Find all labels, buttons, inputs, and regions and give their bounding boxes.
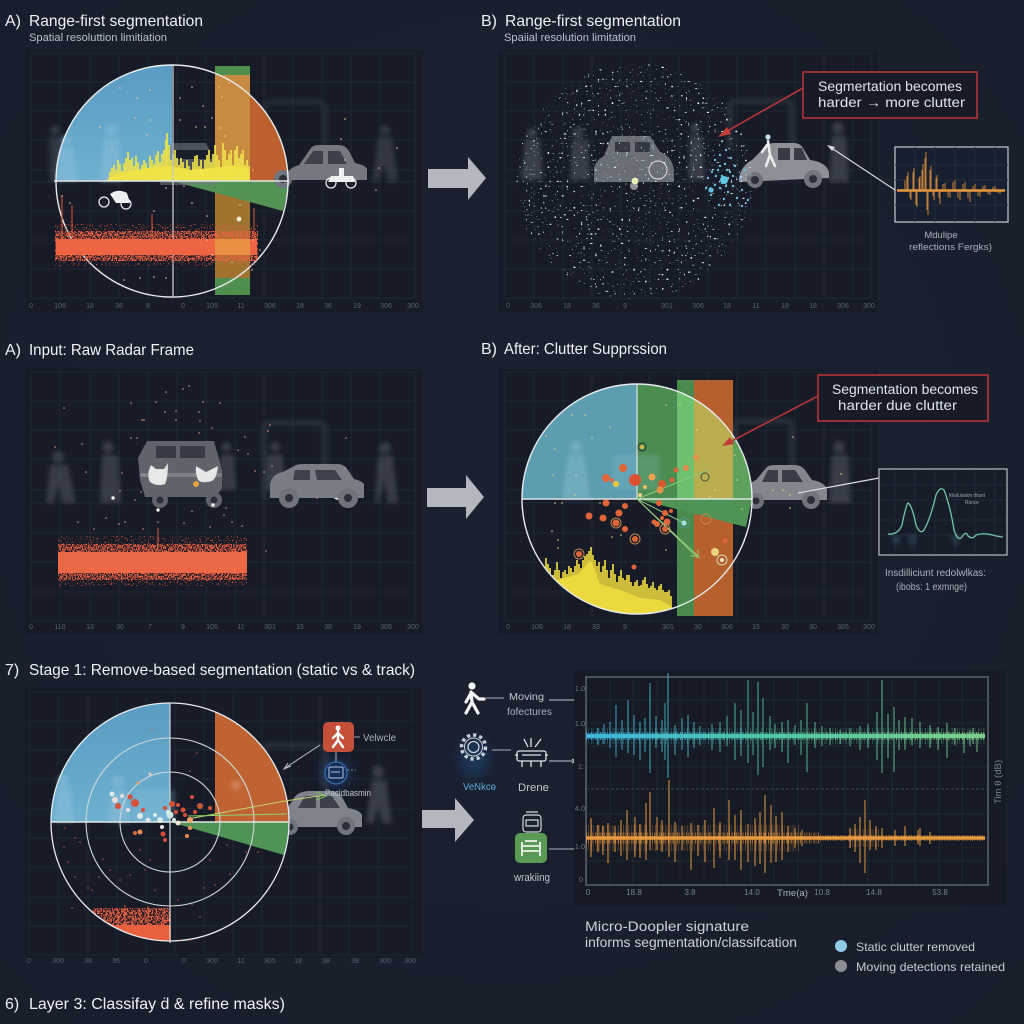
x axis labels: 18	[723, 303, 731, 310]
subheading: spatial resolution: Spatial resoluttion limitiation	[29, 32, 167, 44]
x axis labels: 18	[563, 303, 571, 310]
x axis labels: 9	[623, 624, 627, 631]
ghost figures in blue quadrant	[54, 775, 241, 822]
detection rings	[574, 443, 727, 565]
right grey car	[270, 464, 364, 508]
x axis labels	[506, 624, 875, 631]
heading: B range-first: B)	[481, 13, 497, 30]
x axis labels: 36	[112, 958, 120, 965]
label: walking: wrakiing	[513, 872, 550, 884]
x axis labels: 15	[752, 624, 760, 631]
grey car	[274, 145, 367, 188]
x axis labels: 38	[351, 958, 359, 965]
x axis labels: 106	[54, 303, 66, 310]
x axis tick labels: 14.0	[744, 888, 760, 897]
x axis labels: 11	[752, 303, 760, 310]
red clutter band	[58, 528, 247, 586]
arrow: callout to segments	[722, 396, 818, 446]
y axis tick labels: 1.0	[575, 842, 585, 851]
x axis labels: 19	[353, 624, 361, 631]
x axis labels: 0	[506, 624, 510, 631]
x axis labels: 9	[181, 624, 185, 631]
heading: layer 3: 6)	[5, 996, 19, 1013]
x axis tick labels: 0	[586, 888, 591, 897]
x axis labels: 30	[781, 624, 789, 631]
y axis tick labels	[575, 684, 585, 884]
x axis labels	[506, 303, 875, 310]
scattered detections	[546, 405, 841, 550]
x axis tick labels: 18.8	[626, 888, 642, 897]
x axis labels: 106	[531, 624, 543, 631]
x axis labels: 33	[592, 624, 600, 631]
legend	[835, 940, 1005, 974]
y axis tick labels: 1.0	[575, 719, 585, 728]
callout: more clutter	[803, 72, 977, 118]
x axis labels: 301	[264, 624, 276, 631]
x axis labels: 301	[662, 624, 674, 631]
x axis labels: 18	[563, 624, 571, 631]
inset caption	[909, 230, 992, 253]
panel: A range-first segmentation	[25, 50, 423, 312]
tracking arrows	[188, 792, 326, 819]
heading: layer 3: Layer 3: Classifay ḋ & refine masks)	[29, 996, 285, 1013]
caption: micro-Doppler	[585, 919, 797, 950]
icon: gear	[459, 735, 489, 778]
x axis labels: 300	[52, 958, 64, 965]
panel: B clutter suppression	[498, 369, 878, 634]
heading: A range-first: Range-first segmentation	[29, 13, 203, 30]
white figure	[762, 134, 775, 166]
callout: due clutter: Segmentation becomes	[832, 382, 978, 397]
lower waveform	[586, 780, 985, 873]
x axis labels: 300	[379, 958, 391, 965]
ghost scene silhouettes	[735, 421, 851, 503]
radar rings and axes	[51, 703, 289, 943]
label: pedestrian: Pacldbasmin	[325, 788, 371, 799]
ghost scene silhouettes	[49, 102, 398, 182]
inset caption	[885, 568, 986, 593]
x axis labels: 106	[206, 624, 218, 631]
x axis tick labels: 14.8	[866, 888, 882, 897]
x axis labels: 36	[116, 624, 124, 631]
radar circle segments	[522, 380, 758, 616]
chart: micro-Doppler signature	[574, 670, 1006, 906]
x axis labels: 0	[181, 303, 185, 310]
x axis labels: 0	[29, 624, 33, 631]
icon: walking person	[466, 682, 484, 713]
x axis labels: 19	[353, 303, 361, 310]
x axis title: Tme(a)	[777, 888, 808, 899]
panel: B range-first scatter	[498, 50, 878, 312]
heading: A range-first: A)	[5, 13, 21, 30]
x axis labels: 0	[29, 303, 33, 310]
x axis labels	[27, 958, 416, 965]
x axis labels: 306	[721, 624, 733, 631]
x axis labels: 18	[296, 303, 304, 310]
arrow: row two	[427, 475, 484, 519]
scattered detections	[55, 386, 346, 551]
y axis tick labels: 4.0	[575, 804, 585, 813]
detection cluster	[110, 772, 212, 842]
detection markers	[576, 445, 728, 570]
connector: badge to chart	[549, 848, 574, 850]
label: moving features: Moving	[509, 691, 544, 703]
heading: B clutter suppression: After: Clutter Supprssion	[504, 341, 667, 358]
subheading: spatial limitation: Spaiial resolution limitation	[504, 32, 636, 44]
upper waveform	[586, 673, 985, 778]
yellow spectrum	[105, 133, 250, 181]
x axis labels: 9	[146, 303, 150, 310]
x axis labels: 300	[404, 958, 416, 965]
icon: red pedestrian	[323, 722, 354, 752]
x axis labels: 306	[380, 303, 392, 310]
x axis labels: 11	[237, 958, 245, 965]
arrow: inset to scene	[827, 145, 895, 190]
y axis title: Tim θ (dB)	[993, 760, 1004, 804]
cyan clutter cluster	[706, 150, 748, 206]
panel: A raw radar frame	[25, 369, 423, 634]
red clutter band	[55, 195, 258, 266]
x axis labels: 30	[694, 624, 702, 631]
inset: smooth signature curve	[879, 469, 1007, 555]
label: moving features: fofectures	[507, 706, 552, 718]
legend: Static clutter removed	[856, 940, 975, 954]
caption: micro-Doppler: informs segmentation/classifcation	[585, 935, 797, 950]
ghost scene silhouettes	[521, 101, 849, 182]
grey car	[746, 465, 827, 509]
legend: Moving detections retained	[856, 960, 1005, 974]
heading: A input raw radar frame: A)	[5, 342, 21, 359]
icon: car outline	[523, 812, 541, 832]
panel: stage 1 radar	[25, 688, 423, 965]
yellow spectrum	[545, 547, 672, 614]
x axis labels: 38	[84, 958, 92, 965]
x axis labels: 0	[144, 958, 148, 965]
grey car	[282, 791, 362, 835]
label: vehicle: Velwcle	[363, 733, 396, 744]
x axis labels: 306	[692, 303, 704, 310]
y axis tick labels: 1.0	[575, 684, 585, 693]
x axis labels: 36	[592, 303, 600, 310]
icon: blue vehicle	[324, 752, 356, 785]
callout: more clutter: harder → more clutter	[818, 95, 966, 110]
x axis tick labels: 3.8	[684, 888, 696, 897]
arrow: drone to chart	[549, 759, 576, 763]
callout: due clutter	[818, 375, 988, 421]
x axis labels: 105	[206, 303, 218, 310]
ghost figures over blue quadrant	[56, 124, 122, 181]
radar segments	[51, 700, 295, 855]
x axis labels: 305	[264, 958, 276, 965]
green tracking arrows	[637, 470, 708, 558]
x axis labels: 18	[294, 958, 302, 965]
radar circle segments	[56, 65, 290, 295]
x axis labels: 38	[322, 958, 330, 965]
x axis labels: 36	[115, 303, 123, 310]
x axis labels: 15	[296, 624, 304, 631]
car behind the circle	[160, 143, 218, 185]
inset caption: reflections Fergks)	[909, 242, 992, 253]
right grey car	[739, 143, 829, 188]
x axis labels: 305	[837, 624, 849, 631]
arrow: row one	[428, 157, 486, 200]
x axis labels: 0	[506, 303, 510, 310]
x axis labels: 18	[86, 303, 94, 310]
arrow: icon to wedge	[284, 745, 320, 769]
x axis labels: 300	[407, 303, 419, 310]
x axis labels: 300	[863, 303, 875, 310]
connector: gear to drone	[492, 749, 511, 751]
callout: more clutter: Segmertation becomes	[818, 79, 962, 94]
x axis labels: 300	[863, 624, 875, 631]
inset: smooth signature curve: Rance	[965, 500, 979, 506]
x axis labels: 9	[623, 303, 627, 310]
x axis labels: 11	[237, 303, 245, 310]
arrow: callout to point cloud	[718, 88, 803, 137]
x axis labels: 110	[54, 624, 66, 631]
x axis labels: 38	[324, 624, 332, 631]
red clutter wedge	[92, 905, 171, 940]
radar axes and outline	[522, 384, 752, 614]
arrow: row three	[422, 798, 474, 842]
point cloud	[514, 60, 754, 304]
radar axes and outline	[54, 65, 289, 297]
x axis tick labels: 53.8	[932, 888, 948, 897]
callout: due clutter: harder due clutter	[838, 398, 958, 413]
x axis labels: 36	[324, 303, 332, 310]
x axis labels: 300	[206, 958, 218, 965]
y axis tick labels: 0	[579, 875, 583, 884]
inset caption: Mdulipe	[924, 230, 958, 241]
x axis labels	[29, 303, 419, 310]
scattered detections	[64, 729, 258, 940]
x axis labels: 0	[182, 958, 186, 965]
left grey car	[138, 441, 222, 508]
inset: smooth signature curve: Modulation ditant	[949, 493, 985, 499]
inset: multiple reflections waveform	[895, 147, 1008, 222]
x axis tick labels	[586, 888, 948, 897]
x axis labels: 306	[837, 303, 849, 310]
white reflection blobs	[148, 463, 347, 500]
x axis labels	[29, 624, 419, 631]
ghost scene silhouettes	[46, 423, 398, 503]
x axis labels: 18	[781, 303, 789, 310]
inset caption: (ibobs: 1 exmnge)	[896, 582, 967, 593]
x axis labels: 300	[407, 624, 419, 631]
line: inset to car	[798, 478, 879, 493]
inset caption: Insdilliciunt redolwlkas:	[885, 568, 986, 579]
x axis labels: 13	[86, 624, 94, 631]
white bike icons	[99, 168, 356, 209]
label: moving features	[486, 691, 577, 718]
icon: green walking badge	[515, 833, 547, 863]
x axis labels: 0	[27, 958, 31, 965]
label: vehicle blue: VeNkcө	[463, 781, 496, 793]
x axis tick labels: 10.8	[814, 888, 830, 897]
x axis labels: 30	[809, 624, 817, 631]
y axis tick labels: 1:	[578, 762, 584, 771]
scattered detections	[62, 83, 397, 280]
heading: B range-first: Range-first segmentation	[505, 13, 681, 30]
heading: A input raw radar frame: Input: Raw Radar Frame	[29, 342, 194, 359]
heading: stage 1: Stage 1: Remove-based segmentation (static vs & track)	[29, 662, 415, 679]
ghost scene silhouettes	[264, 745, 392, 823]
x axis labels: 305	[380, 624, 392, 631]
x axis labels: 301	[661, 303, 673, 310]
ghost figure in blue quadrant	[562, 441, 660, 499]
x axis labels: 306	[530, 303, 542, 310]
icon: drone	[515, 738, 548, 767]
label: drone: Drene	[518, 782, 549, 794]
heading: B clutter suppression: B)	[481, 341, 497, 358]
x axis labels: 18	[809, 303, 817, 310]
caption: micro-Doppler: Micro-Doopler signature	[585, 919, 749, 934]
x axis labels: 7	[148, 624, 152, 631]
left grey car	[594, 136, 674, 190]
heading: stage 1: 7)	[5, 662, 19, 679]
x axis labels: 11	[237, 624, 245, 631]
x axis labels: 306	[264, 303, 276, 310]
